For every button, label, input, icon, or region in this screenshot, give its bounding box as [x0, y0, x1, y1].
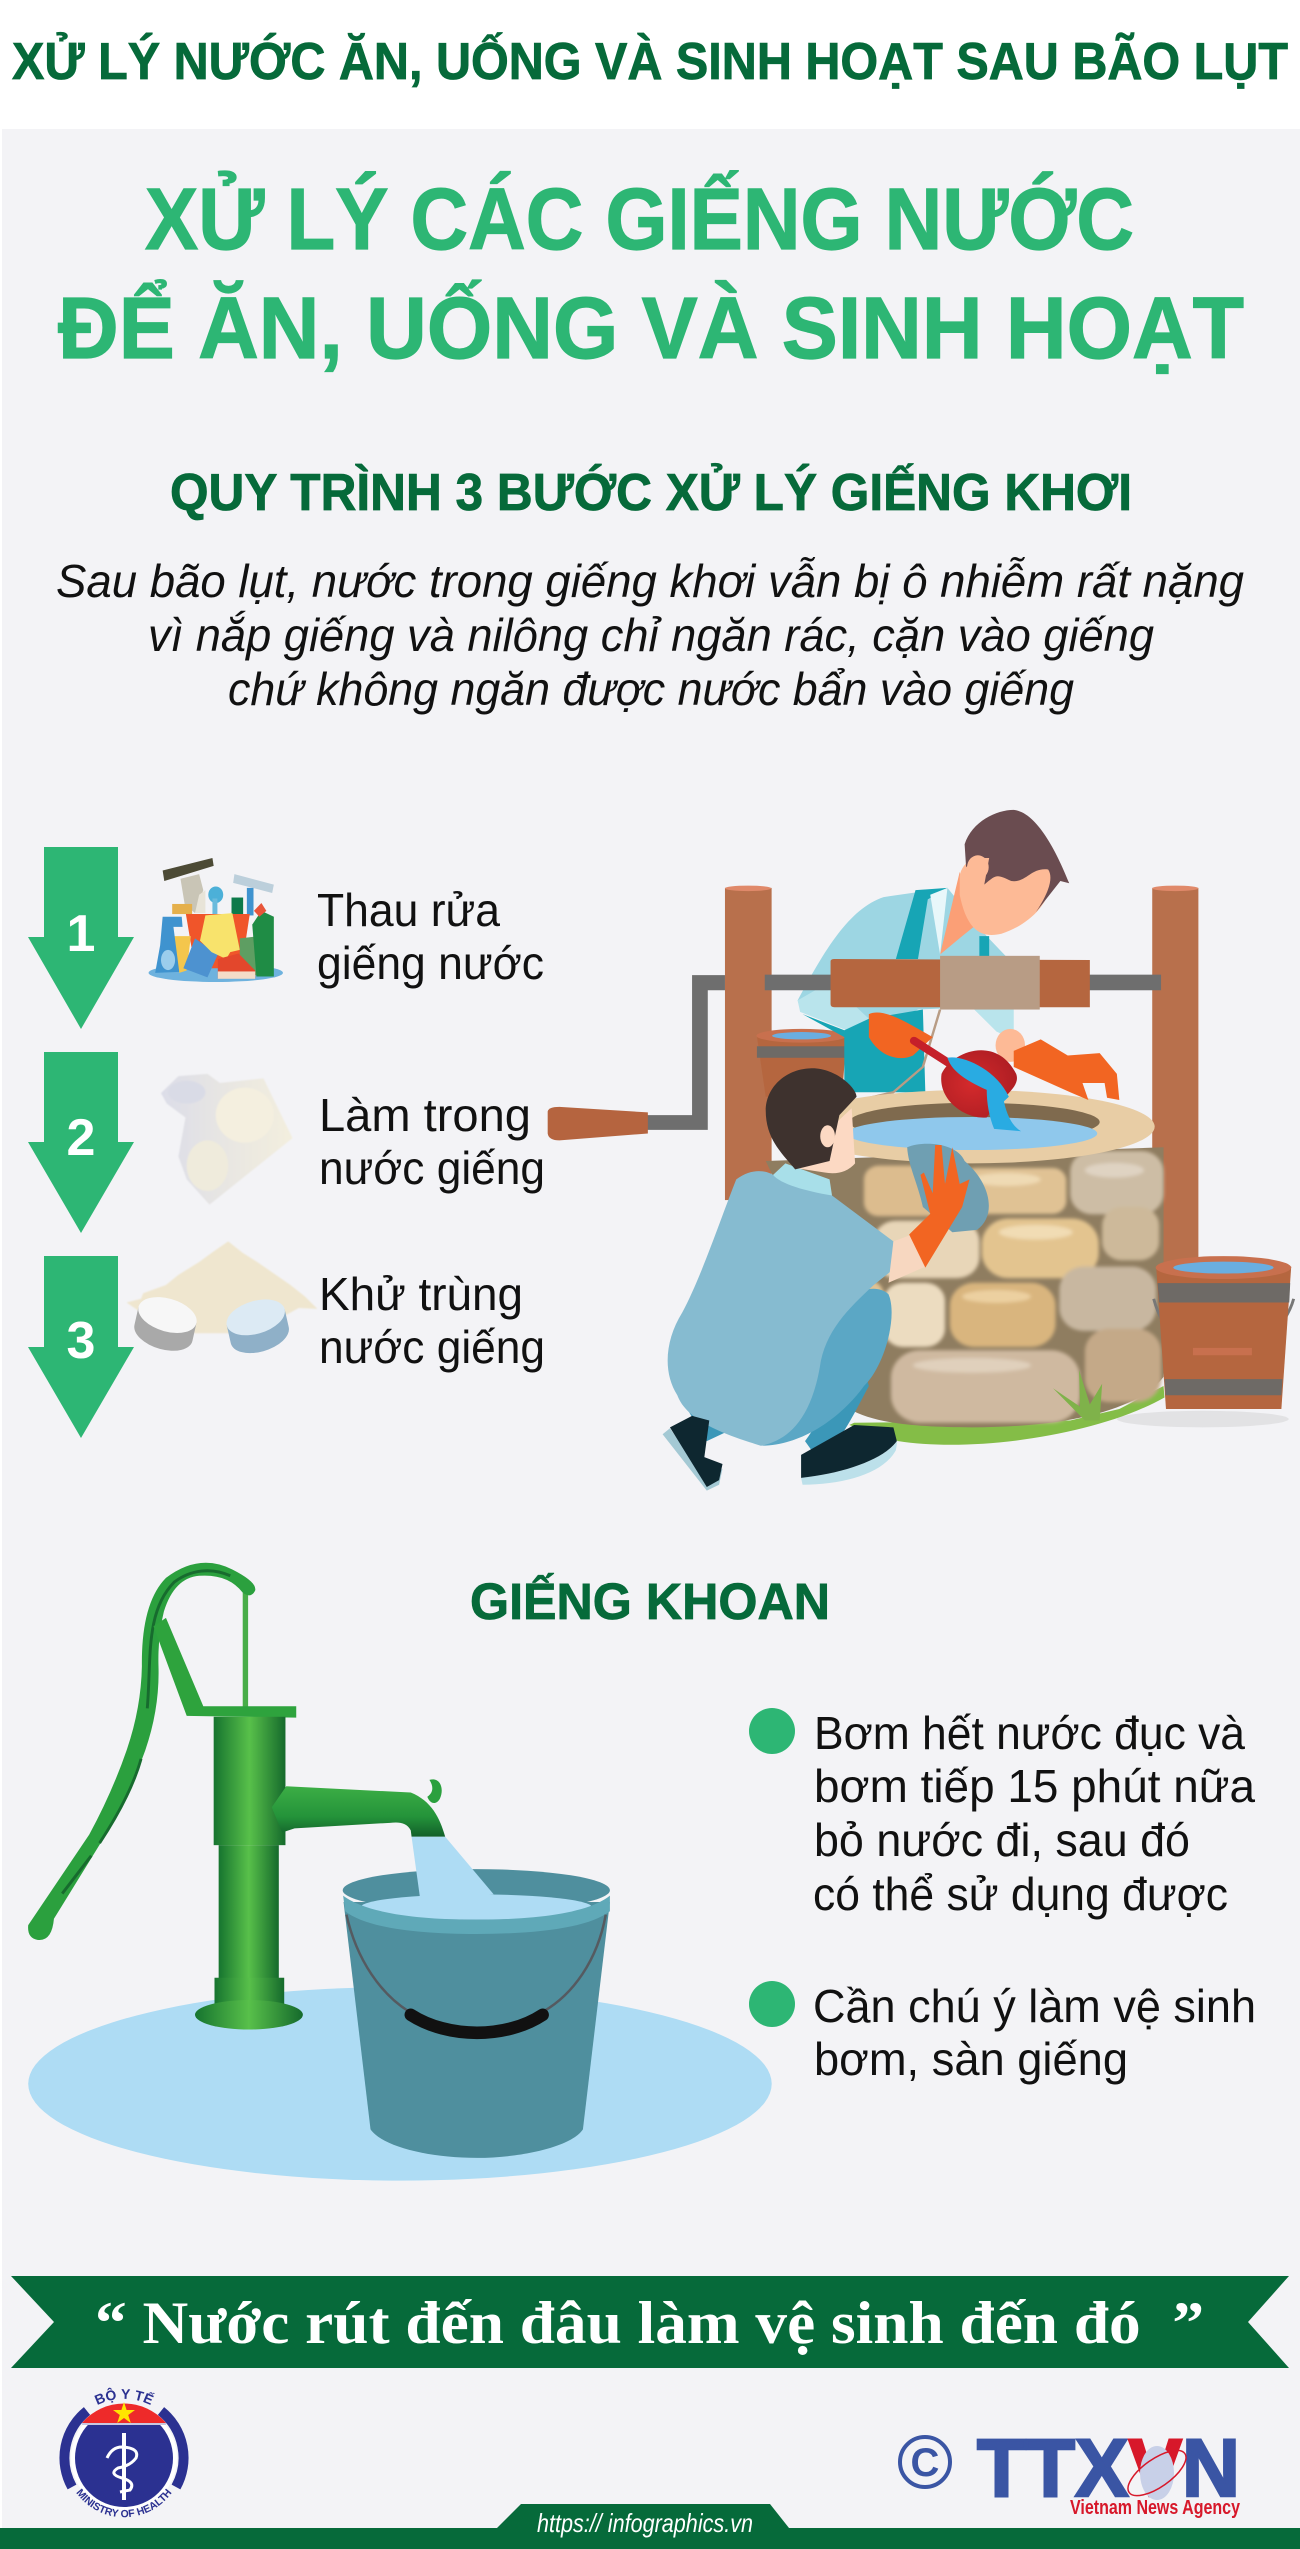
illustration: green hand pump and bucket	[28, 1563, 772, 2181]
intro paragraph: vì nắp giếng và nilông chỉ ngăn rác, cặn vào giếng	[148, 609, 1154, 661]
hand pump	[28, 1563, 445, 2030]
step 1 label	[317, 884, 544, 989]
footer bar with URL	[0, 2504, 1300, 2549]
arrow step 2	[28, 1052, 134, 1233]
section heading: three-step process: QUY TRÌNH 3 BƯỚC XỬ LÝ GIẾNG KHƠI	[170, 463, 1132, 522]
bullet: pump out dirty water: có thể sử dụng được	[813, 1868, 1228, 1920]
illustration: two men cleaning a stone well	[548, 810, 1294, 1491]
step 2 label: Làm trong	[319, 1089, 531, 1141]
main title: ĐỂ ĂN, UỐNG VÀ SINH HOẠT	[58, 280, 1244, 377]
step 2 label	[319, 1089, 545, 1194]
step 3 label: Khử trùng	[319, 1268, 523, 1320]
logo: Ministry of Health: BỘ Y TẾ	[94, 2388, 155, 2405]
arrow step 2: 2	[67, 1109, 95, 1167]
bullet: pump out dirty water	[749, 1707, 1255, 1920]
icon: chlorine powder and tablets	[127, 1241, 317, 1359]
well rim and water	[789, 1090, 1155, 1163]
step 2 label: nước giếng	[319, 1142, 545, 1194]
arrow step 1	[28, 847, 134, 1029]
step 3 label	[319, 1268, 545, 1373]
step arrows column	[28, 847, 134, 1438]
bullet: pump out dirty water: bơm tiếp 15 phút nữa	[814, 1760, 1255, 1812]
right wooden bucket	[1154, 1256, 1294, 1409]
step 1 label: giếng nước	[317, 937, 544, 989]
well wall and grass	[766, 1147, 1289, 1445]
man at front	[663, 1068, 989, 1491]
logo: TTXVN: TTXVN	[977, 2423, 1240, 2514]
arrow step 3	[28, 1256, 134, 1438]
section heading: drilled well: GIẾNG KHOAN	[470, 1572, 830, 1630]
bullet: pump out dirty water: bỏ nước đi, sau đó	[814, 1814, 1190, 1866]
icon: cleaning supplies	[149, 858, 283, 982]
arrow step 1: 1	[67, 905, 95, 963]
gloves and red ladle	[869, 1012, 1119, 1131]
well posts and crank	[548, 886, 1198, 1269]
slogan ribbon: “ Nước rút đến đâu làm vệ sinh đến đó ”	[95, 2290, 1204, 2356]
logo: TTXVN: C	[911, 2441, 939, 2485]
icon: alum crystal	[161, 1074, 293, 1205]
bullet: clean the pump and floor: bơm, sàn giếng	[814, 2033, 1128, 2085]
footer bar with URL: https:// infographics.vn	[537, 2508, 753, 2538]
bullet: clean the pump and floor: Cần chú ý làm vệ sinh	[813, 1980, 1256, 2032]
small bucket behind well	[756, 1029, 847, 1097]
blue water puddle	[28, 1987, 772, 2181]
slogan ribbon	[11, 2276, 1289, 2368]
intro paragraph	[56, 555, 1244, 715]
step 1 label: Thau rửa	[317, 884, 500, 936]
arrow step 3: 3	[67, 1312, 95, 1370]
bullet: pump out dirty water: Bơm hết nước đục và	[814, 1707, 1245, 1759]
intro paragraph: chứ không ngăn được nước bẩn vào giếng	[228, 663, 1074, 715]
intro paragraph: Sau bão lụt, nước trong giếng khơi vẫn bị ô nhiễm rất nặng	[56, 555, 1244, 607]
main title	[58, 171, 1244, 377]
step 3 label: nước giếng	[319, 1321, 545, 1373]
axle, log and rope	[765, 956, 1161, 1101]
main title: XỬ LÝ CÁC GIẾNG NƯỚC	[145, 171, 1134, 268]
logo: Ministry of Health: MINISTRY OF HEALTH	[76, 2488, 172, 2518]
man at back	[798, 810, 1069, 1092]
logo: Ministry of Health	[59, 2388, 189, 2518]
bucket	[343, 1837, 610, 2158]
bullet: clean the pump and floor	[749, 1980, 1256, 2085]
logo: TTXVN: Vietnam News Agency	[1070, 2497, 1241, 2519]
